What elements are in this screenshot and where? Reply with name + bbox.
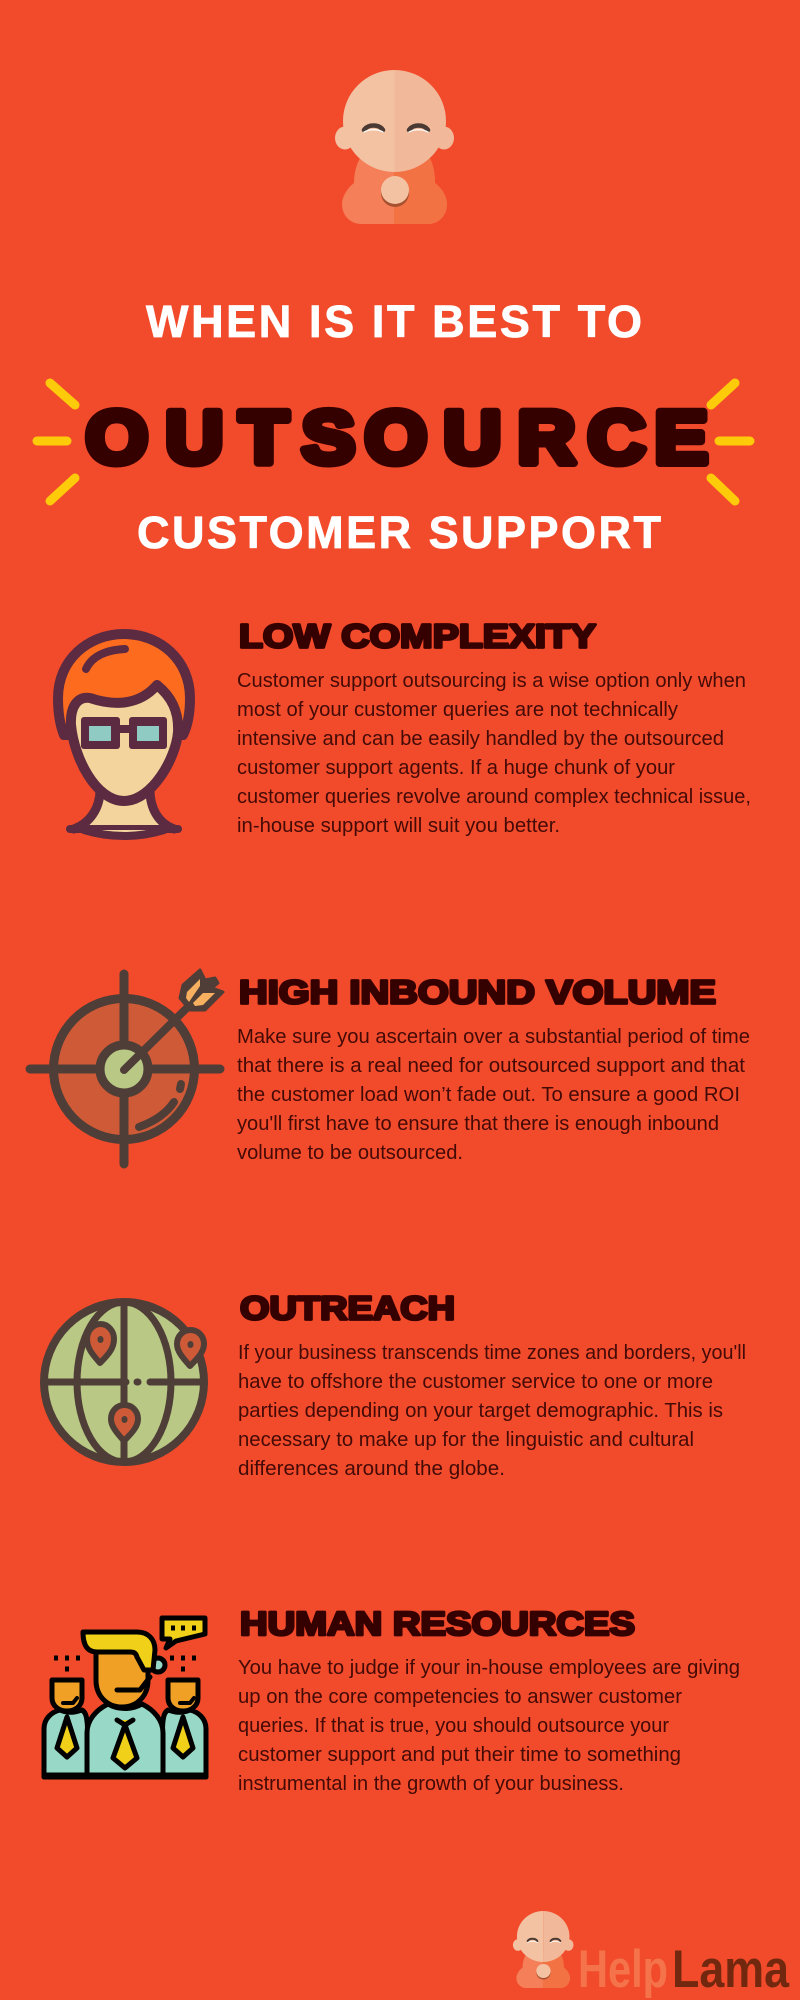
logo: HelpLama [513,1911,789,1999]
heading: HUMAN RESOURCES [240,1605,635,1642]
icon: person with glasses [58,634,190,836]
heading: LOW COMPLEXITY [239,618,596,654]
body text: customer support and put their time to something [238,1743,681,1766]
title line 1: WHEN IS IT BEST TO [146,296,642,347]
body text: If your business transcends time zones and borders, you'll [238,1341,746,1364]
icon: lama mascot [335,70,454,224]
panel: high inbound volume [30,970,750,1164]
body text: customer support agents. If a huge chunk of your [237,756,675,779]
body text: instrumental in the growth of your business. [238,1772,624,1795]
body text: volume to be outsourced. [237,1141,463,1164]
body text: the customer load won’t fade out. To ensure a good ROI [237,1083,740,1106]
body text: Make sure you ascertain over a substantial period of time [237,1025,750,1048]
body text: intensive and can be easily handled by the outsourced [237,727,724,750]
body text: in-house support will suit you better. [237,814,560,837]
heading: OUTREACH [240,1290,455,1326]
body text: You have to judge if your in-house employees are giving [238,1656,740,1679]
body text [238,1656,740,1795]
body text: most of your customer queries are not technically [237,698,679,721]
body text: differences around the globe. [238,1457,505,1480]
icon: right rays [711,383,750,501]
body text: Customer support outsourcing is a wise option only when [237,669,746,692]
panel: human resources [44,1605,740,1795]
panel: outreach [44,1290,746,1480]
body text: you'll first have to ensure that there is enough inbound [237,1112,719,1135]
body text: customer queries revolve around complex technical issue, [237,785,751,808]
body text [238,1341,746,1480]
body text: have to offshore the customer service to one or more [238,1370,713,1393]
body text [237,1025,750,1164]
icon: support team [44,1618,206,1777]
icon: left rays [37,383,75,501]
body text [237,669,751,837]
logo word: Help: Help [578,1940,668,1999]
body text: that there is a real need for outsourced support and that [237,1054,745,1077]
title line 3: CUSTOMER SUPPORT [137,507,661,558]
body text: up on the core competencies to answer customer [238,1685,682,1708]
body text: parties depending on your target demographic. This is [238,1399,723,1422]
icon: target with arrow [30,970,223,1164]
icon: globe with pins [44,1302,204,1462]
icon: logo mascot [513,1911,574,1988]
heading: HIGH INBOUND VOLUME [239,974,716,1010]
title: outsource: OUTSOURCE [86,397,708,479]
panel: low complexity [58,618,751,837]
body text: queries. If that is true, you should outsource your [238,1714,669,1737]
body text: necessary to make up for the linguistic and cultural [238,1428,694,1451]
